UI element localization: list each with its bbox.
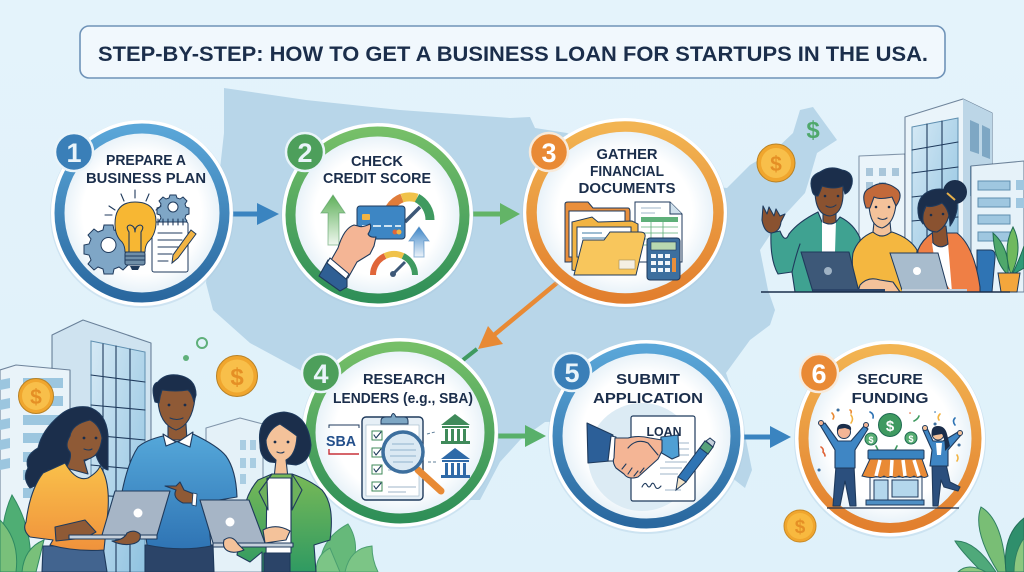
icon: green bank [441,414,470,444]
icon: blue bank [441,448,470,478]
icon: SBA logo [326,425,359,454]
arrow: step 2 to 3 [472,203,520,225]
laptop right [200,500,293,552]
step number: 2 [297,138,313,168]
step label: CHECK [351,153,403,170]
person: man in yellow sweater [852,183,917,292]
plant bottom right [955,507,1024,572]
icon: clipboard checklist [362,414,423,500]
step label [333,371,473,407]
scene: bottom left team with buildings [0,320,378,572]
step number [530,133,568,171]
buildings [859,99,1024,292]
coin [216,356,258,396]
icon: money coins: $ [908,434,914,444]
green dots [183,338,207,361]
coin bottom [784,510,816,542]
icon: woman celebrating [922,426,962,506]
chair [977,250,995,292]
scene: top right team with buildings [757,99,1024,292]
step label [852,371,928,407]
icon: pen [676,438,715,490]
laptop left [69,491,170,545]
coin [757,144,795,182]
coin: $ [770,153,782,176]
step label [593,371,703,407]
icons: business plan [84,190,196,274]
icon: green up arrow [321,195,345,245]
step label: CREDIT SCORE [323,170,431,187]
icon: loan document [631,416,695,501]
person: woman in green jacket [237,412,331,572]
panel: step 5 submit application [548,340,745,534]
coin: $ [30,386,42,409]
step label: DOCUMENTS [578,181,676,197]
step label [578,147,676,197]
buildings [0,320,263,572]
icon: man celebrating [818,420,868,506]
person: woman in orange jacket [915,180,980,292]
plant left [0,495,44,572]
icon: handshake [587,423,679,478]
panel: title banner [80,26,945,78]
step label: GATHER [596,147,658,163]
icon: folders [565,202,645,275]
plant middle [316,524,378,572]
plant in pot [993,227,1024,292]
ground line [827,507,959,509]
icon: SBA logo: SBA [326,433,356,450]
person: man in blue sweater [122,375,237,572]
panel: step 3 gather financial documents [522,118,728,309]
hands and laptops [801,252,967,292]
icons: credit score [319,195,430,291]
arrow: step 4 to 5 [496,425,546,447]
icon: notepad and pencil [152,219,196,272]
icon: credit card [357,206,405,239]
icon: gear left [84,225,133,274]
icon: bottom gauge [373,254,415,277]
arrow: step 5 to 6 [742,426,791,448]
panel: step 2 check credit score [281,123,474,309]
icon: loan document: LOAN [646,425,682,439]
icon: money coins: $ [886,418,895,435]
icon: blue up arrow [409,227,429,257]
panel: step 1 prepare a business plan [50,120,234,308]
icon: confetti [819,410,959,470]
person: man in teal shirt [762,168,860,292]
icon: money coins: $ [868,435,874,445]
step label: SECURE [857,371,923,388]
icon: gear right [157,195,189,227]
step label: FUNDING [852,390,928,407]
panel: step 4 research lenders [301,338,499,529]
step number [553,353,591,391]
step number [55,133,93,171]
step label: SUBMIT [616,371,680,388]
step label [86,152,206,187]
step number [286,133,324,171]
table line [761,291,1010,293]
arrow: step 1 to 2 [232,203,279,225]
step label: PREPARE A [106,152,186,169]
icon: calculator [647,238,680,280]
step label: BUSINESS PLAN [86,170,206,187]
icon: storefront [862,450,928,505]
arrow: step 3 to 4 [463,282,558,360]
icon: spreadsheet [635,202,682,262]
panel: step 6 secure funding [794,340,986,538]
icon: magnifying glass [383,432,441,491]
step label: RESEARCH [363,371,445,388]
step number: 6 [811,359,827,389]
coin bottom: $ [795,517,806,538]
step number: 5 [564,358,580,388]
coin: $ [230,364,244,391]
heading: STEP-BY-STEP: HOW TO GET A BUSINESS LOAN FOR STARTUPS IN THE USA. [98,42,928,66]
step label [323,153,431,187]
map of the USA [206,88,837,500]
step number: 3 [541,138,557,168]
step label: FINANCIAL [590,164,664,180]
person: woman in orange top [25,407,108,572]
icon: pale backdrop [588,403,696,511]
step number: 1 [66,138,82,168]
step label: APPLICATION [593,390,703,407]
icon: light bulb [105,190,161,270]
icon: money coins [865,414,917,445]
green dollar sign: $ [806,117,820,144]
step label: LENDERS (e.g., SBA) [333,390,473,407]
coin [18,378,54,414]
step number [800,354,838,392]
icon: hand with sleeve [319,224,376,291]
connector dashes [427,432,437,462]
step number [302,354,340,392]
icon: top gauge [386,197,430,222]
step number: 4 [313,359,329,389]
